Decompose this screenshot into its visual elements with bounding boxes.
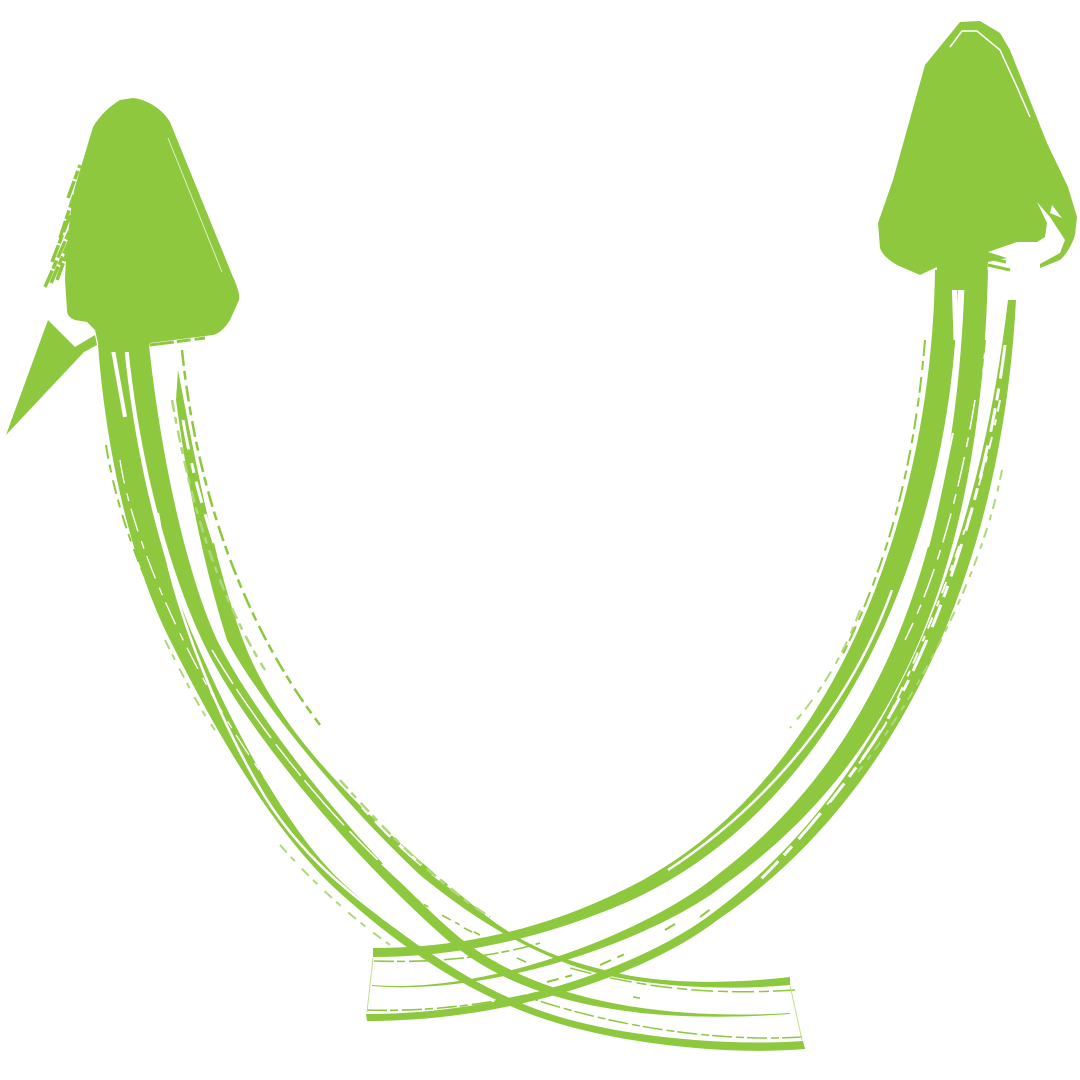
side hairline: right arrow tail — [367, 958, 373, 1012]
outer brush strand: right arrow — [366, 300, 1016, 1021]
side hairline: left arrow tail — [790, 985, 802, 1040]
main brush strand: right arrow — [372, 270, 988, 987]
dry-brush gaps: right arrow — [668, 275, 1005, 880]
head lower fringe: left — [150, 338, 205, 345]
inner brush strand: left arrow — [176, 370, 790, 988]
barb: left arrow tail flick — [6, 320, 97, 435]
rough edge hairs: right arrow — [367, 340, 1002, 1010]
rough edge hairs: left arrow — [106, 350, 802, 1038]
arrow: curving up to the left — [6, 98, 805, 1051]
head notch: right — [1050, 205, 1062, 218]
head fringe: left — [45, 165, 80, 287]
main brush strand: left arrow — [128, 345, 790, 1017]
head highlight: left — [168, 138, 222, 272]
arrow: curving up to the right — [366, 21, 1077, 1021]
upper brush strand: right arrow — [373, 270, 958, 957]
outer brush strand: left arrow — [98, 345, 805, 1051]
arrow head: right — [878, 21, 1077, 290]
head highlight: right — [950, 31, 1030, 117]
head lower fringe: right — [988, 258, 1010, 270]
arrow head: left — [65, 98, 239, 352]
dry-brush gaps: left arrow — [113, 350, 452, 945]
